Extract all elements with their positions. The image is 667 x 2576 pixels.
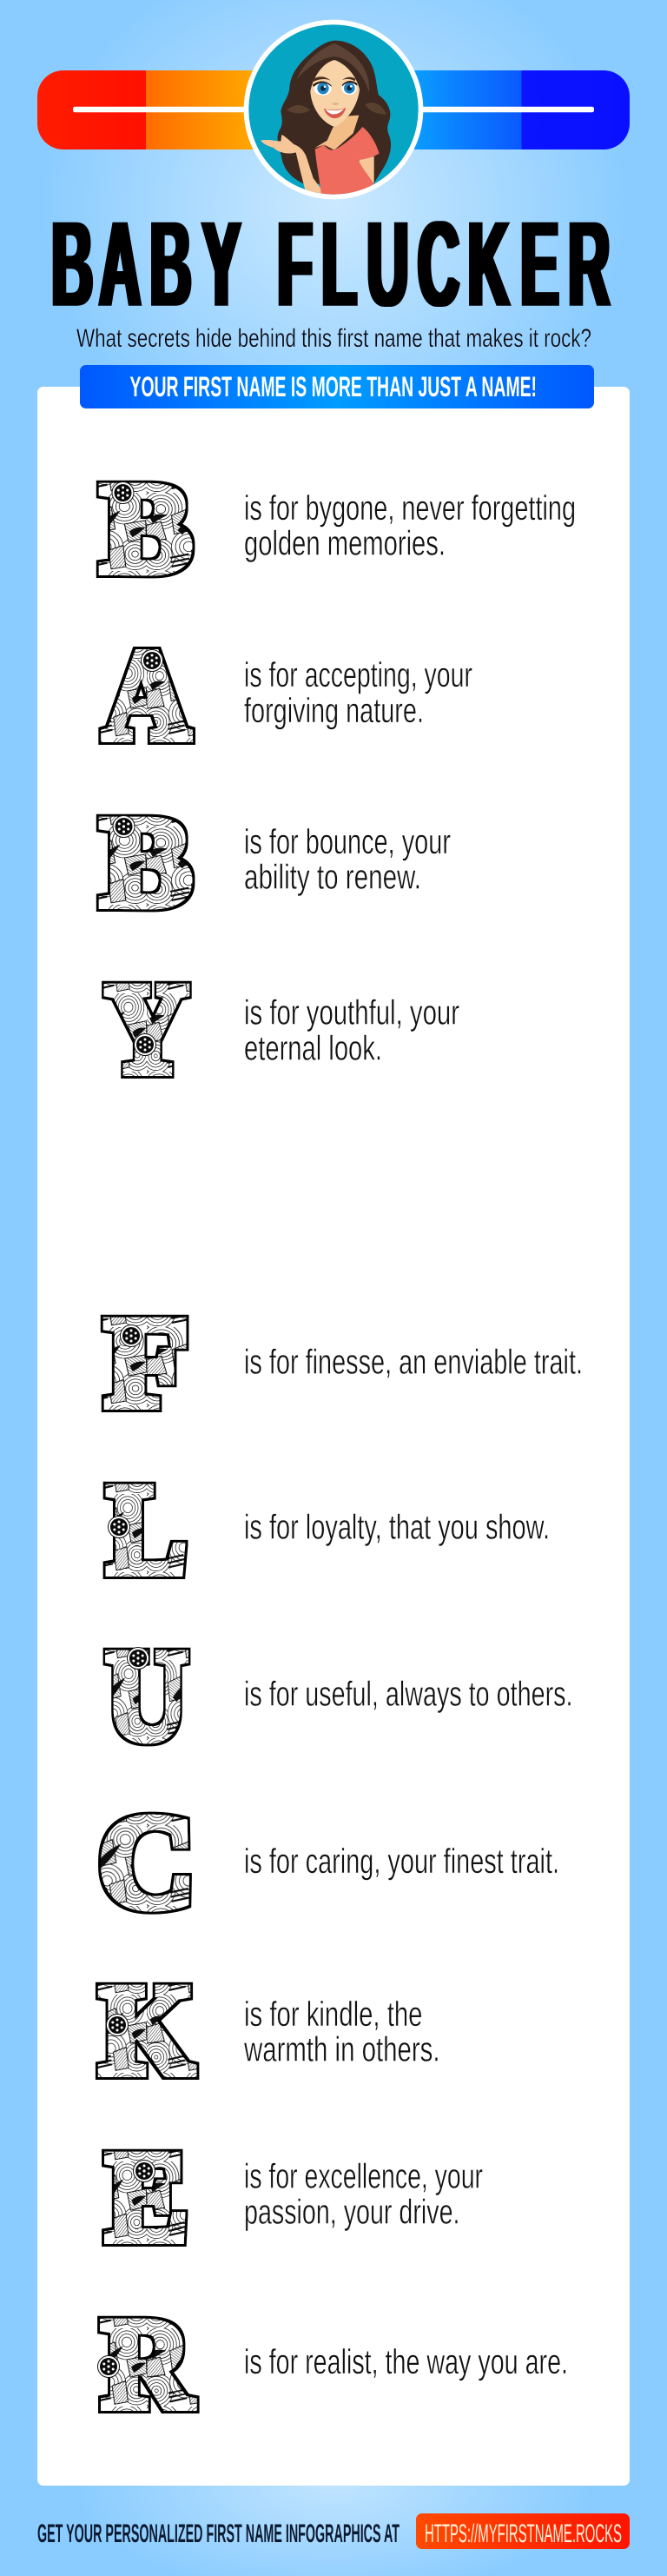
letter U: U [106,1624,188,1766]
row: B for bounce [102,791,451,933]
row: Y for youthful [106,959,459,1100]
letter L: L [108,1458,186,1600]
letter B: B [102,457,191,599]
text: youthful: is for youthful, your [244,993,459,1032]
title: BABY FLUCKER [51,197,610,332]
header gradient bar [37,70,630,149]
row: F for finesse [105,1291,583,1433]
text: bounce: is for bounce, your [244,823,451,861]
avatar: cartoon woman in circle [244,20,423,206]
text: loyalty: is for loyalty, that you show. [244,1509,550,1547]
text: bygone [244,489,576,563]
text: accepting: is for accepting, your [244,656,472,694]
row: R for realist [97,2294,568,2434]
row: L for loyalty [108,1458,550,1600]
row: B for bygone [102,457,576,599]
text: bounce [244,823,451,896]
text: bygone: golden memories. [244,525,446,563]
banner [80,365,594,408]
footer url button [416,2513,630,2549]
letter E: E [106,2127,188,2268]
text: kindle [243,1995,439,2069]
letter R: R [102,2294,193,2434]
letter C: C [99,1789,195,1935]
text: kindle: warmth in others. [243,2031,439,2069]
white line across bar [73,107,594,112]
row: A for accepting [104,625,472,766]
letter Y: Y [106,959,188,1100]
text: excellence [244,2158,483,2231]
text: youthful [244,993,459,1067]
letter A: A [104,625,189,766]
text: bounce: ability to renew. [244,858,421,896]
letter F: F [105,1291,188,1433]
text: youthful: eternal look. [244,1029,382,1067]
text: accepting: forgiving nature. [244,692,424,730]
letter K: K [100,1959,194,2101]
row: E for excellence [106,2127,483,2268]
row: C for caring [99,1789,559,1935]
text: excellence: is for excellence, your [244,2158,483,2196]
row: U for useful [106,1624,572,1766]
text: kindle: is for kindle, the [244,1995,422,2034]
text: accepting [244,656,472,730]
main white panel [37,387,630,2486]
text: excellence: passion, your drive. [244,2193,460,2231]
row: K for kindle [100,1959,440,2101]
letter B: B [102,791,191,933]
